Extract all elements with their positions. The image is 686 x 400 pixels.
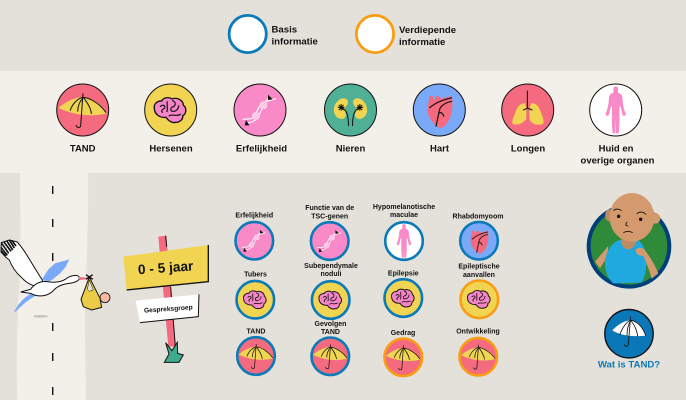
category: Hersenen: Hersenen bbox=[149, 144, 193, 154]
legend item: basis informatie: informatie bbox=[272, 36, 318, 48]
ears bbox=[605, 209, 611, 221]
legend item: basis informatie bbox=[229, 15, 318, 53]
button: Wat is TAND? bbox=[598, 310, 660, 370]
topic: Ontwikkeling bbox=[456, 328, 500, 376]
category: Huid en overige organen bbox=[581, 84, 655, 166]
baby bundle bbox=[81, 277, 102, 310]
left arm bbox=[595, 246, 608, 268]
legend item: verdiepende informatie bbox=[356, 15, 456, 53]
topic: Gevolgen TAND bbox=[312, 321, 349, 375]
topic: Epileptische aanvallen bbox=[458, 264, 500, 318]
topic: TAND bbox=[237, 328, 275, 375]
topic: Subependymale noduli bbox=[304, 263, 358, 319]
legend: basic and in-depth information bbox=[229, 15, 456, 53]
right arm bbox=[636, 248, 658, 279]
sign: age range: 0 - 5 jaar bbox=[137, 258, 194, 277]
stork wing bbox=[1, 240, 42, 286]
topic: Hypomelanotische maculae: maculae bbox=[390, 212, 418, 219]
road with dashes bbox=[17, 173, 88, 400]
child portrait bbox=[589, 193, 669, 287]
stork far wing and legs bbox=[14, 259, 69, 312]
category: Nieren bbox=[325, 84, 376, 154]
topic: Gevolgen TAND: TAND bbox=[321, 329, 340, 336]
category: Nieren: Nieren bbox=[336, 144, 365, 154]
topic: Erfelijkheid: Erfelijkheid bbox=[235, 212, 273, 220]
topic: Hypomelanotische maculae: Hypomelanotische bbox=[373, 204, 435, 211]
category: Erfelijkheid bbox=[234, 84, 287, 154]
category: Hersenen bbox=[145, 84, 197, 154]
legend item: basis informatie: Basis bbox=[272, 24, 297, 36]
topic: Epilepsie bbox=[384, 270, 422, 317]
topic: Tubers: Tubers bbox=[244, 272, 267, 278]
portrait circle bbox=[589, 206, 669, 287]
category: TAND bbox=[57, 84, 109, 154]
neck bbox=[621, 239, 637, 249]
category: Huid en overige organen: overige organen bbox=[581, 156, 655, 166]
topic: Epileptische aanvallen: Epileptische bbox=[458, 264, 500, 270]
stork beak bbox=[79, 277, 95, 280]
topic: Gevolgen TAND: Gevolgen bbox=[315, 321, 346, 328]
stork shadow bbox=[33, 315, 48, 318]
topic: Functie van de TSC-genen: TSC-genen bbox=[311, 214, 348, 220]
topic: Hypomelanotische maculae bbox=[373, 204, 435, 260]
category: Huid en overige organen: Huid en bbox=[599, 144, 634, 154]
panel: category band bbox=[0, 71, 686, 173]
baby head bbox=[100, 293, 110, 303]
category: Erfelijkheid: Erfelijkheid bbox=[236, 144, 287, 154]
topic: Gedrag: Gedrag bbox=[391, 330, 415, 337]
topic: Subependymale noduli: noduli bbox=[320, 271, 342, 278]
topic: Erfelijkheid bbox=[235, 212, 273, 260]
category: Longen: Longen bbox=[511, 144, 545, 154]
stork carrying baby bundle bbox=[1, 240, 110, 318]
category: Longen bbox=[502, 84, 554, 154]
category: TAND: TAND bbox=[70, 144, 96, 154]
button: Wat is TAND?: Wat is TAND? bbox=[598, 360, 660, 370]
topic: Subependymale noduli: Subependymale bbox=[304, 263, 358, 270]
head bbox=[610, 193, 654, 242]
stork body bbox=[21, 275, 79, 296]
topic: TAND: TAND bbox=[247, 328, 265, 336]
topic: Tubers bbox=[236, 272, 274, 319]
legend item: verdiepende informatie: Verdiepende bbox=[399, 25, 456, 36]
topic: Ontwikkeling: Ontwikkeling bbox=[456, 328, 500, 336]
topic: Functie van de TSC-genen: Functie van de bbox=[305, 205, 354, 212]
topic: Rhabdomyoom bbox=[453, 214, 503, 260]
topic: Functie van de TSC-genen bbox=[305, 205, 354, 260]
topic: Gedrag bbox=[384, 330, 422, 376]
category: Hart bbox=[413, 84, 465, 154]
topic: Epileptische aanvallen: aanvallen bbox=[463, 272, 495, 279]
sign: conversation group: Gespreksgroep bbox=[144, 304, 193, 315]
stork feather tips bbox=[1, 240, 16, 256]
topic: Epilepsie: Epilepsie bbox=[388, 270, 419, 278]
topic: Rhabdomyoom: Rhabdomyoom bbox=[453, 214, 503, 220]
grass bbox=[164, 342, 183, 362]
post bbox=[158, 236, 176, 347]
legend item: verdiepende informatie: informatie bbox=[399, 37, 445, 48]
category: Hart: Hart bbox=[430, 144, 450, 154]
signpost: 0 - 5 jaar bbox=[123, 236, 208, 362]
face bbox=[613, 209, 646, 233]
shirt bbox=[605, 240, 647, 283]
icon: white umbrella bbox=[612, 316, 646, 346]
